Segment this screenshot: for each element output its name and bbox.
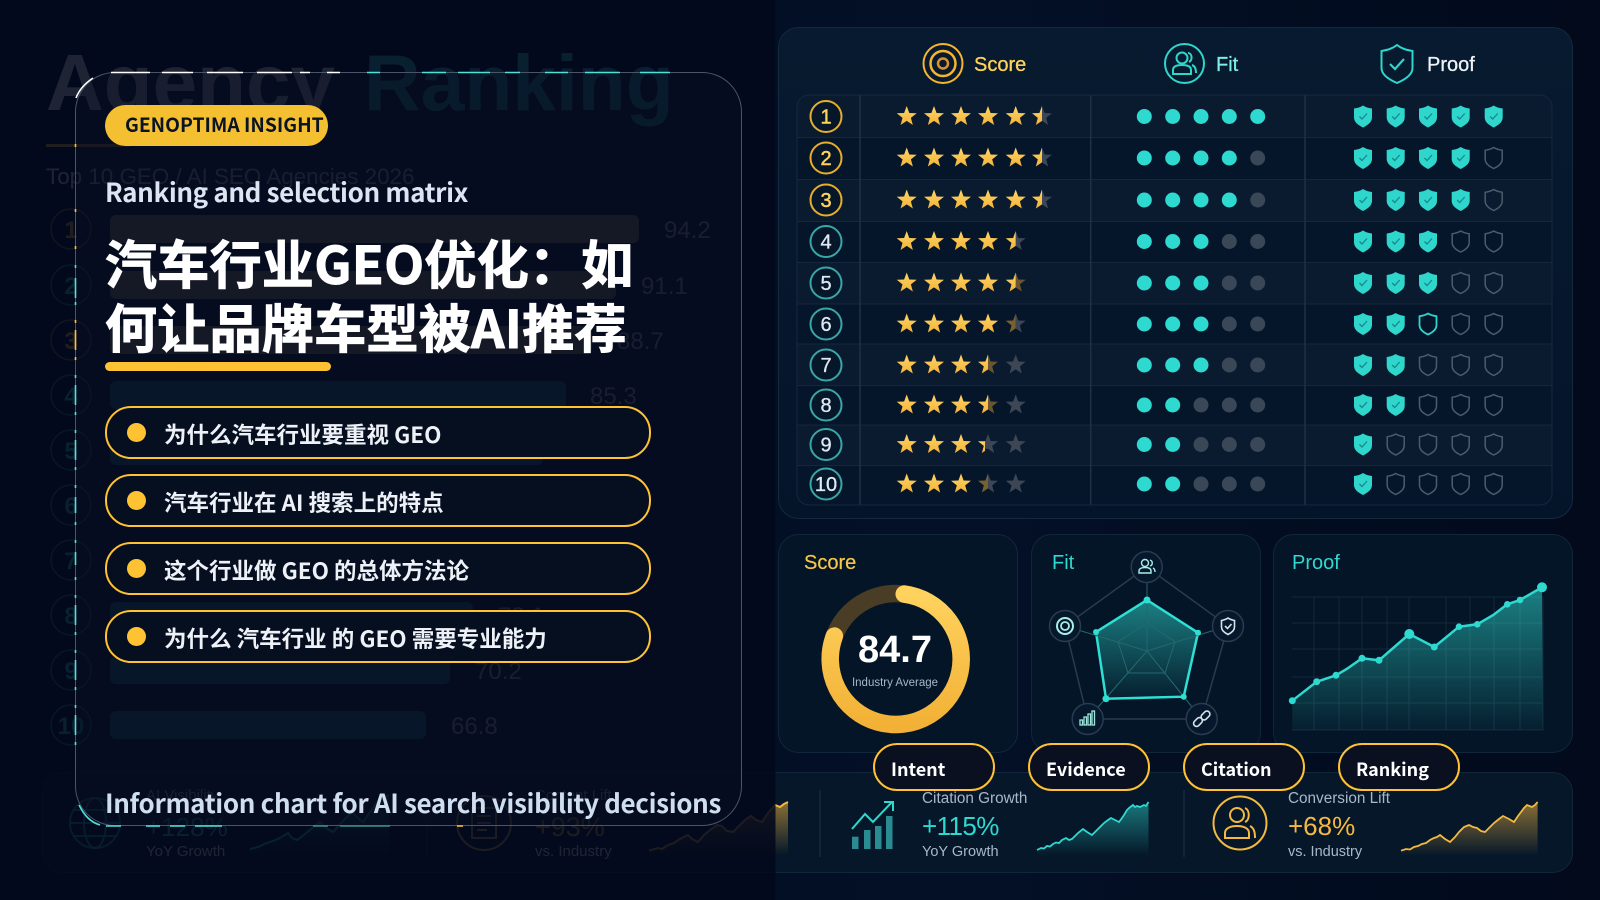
row 2: 2 (820, 148, 832, 170)
ghost bar rows: 88.7 (617, 328, 664, 355)
donut caption: Industry Average (852, 677, 938, 689)
metric: citation growth: Citation Growth (922, 790, 1027, 807)
ghost bar rows: 8 (64, 603, 78, 630)
row 6: 6 (820, 314, 832, 336)
ghost bar rows: 70.2 (475, 658, 522, 685)
tag: intent: Intent (891, 756, 945, 782)
row 7 (810, 350, 1502, 380)
icon: radar shield (1212, 610, 1244, 642)
ghost bar rows: 66.8 (451, 713, 498, 740)
ghost title: Ranking (364, 39, 674, 127)
metric: citation growth: +115% (922, 811, 999, 841)
heading: proof panel: Proof (1292, 552, 1340, 574)
donut value: 84.7 (858, 629, 932, 671)
ghost bar rows: 79.4 (545, 493, 592, 520)
row 4 (810, 226, 1502, 257)
heading: fit panel: Fit (1052, 552, 1075, 574)
title underline (105, 362, 331, 371)
panel: ranking matrix (778, 28, 1572, 518)
footer caption: Information chart for AI search visibility decisions (105, 784, 721, 821)
heading: fit: Fit (1216, 54, 1239, 76)
tag: citation: Citation (1201, 756, 1272, 782)
overlay card (75, 72, 742, 826)
icon: user circle (1214, 796, 1266, 850)
title: 何让品牌车型被AI推荐 (105, 288, 627, 362)
list item 2: 汽车行业在 AI 搜索上的特点 (164, 486, 444, 518)
ghost subtitle: Top 10 GEO / AI SEO Agencies 2026 (46, 164, 414, 189)
metric: citation growth (852, 790, 1148, 860)
ghost bar rows: 73.1 (498, 603, 545, 630)
row 3: 3 (820, 190, 832, 212)
ghost title: Agency (46, 38, 335, 127)
metric: AI visibility: AI Visibility (146, 787, 219, 804)
ghost bar rows: 10 (58, 713, 84, 740)
list item 3: 这个行业做 GEO 的总体方法论 (164, 554, 469, 586)
row 5: 5 (820, 273, 832, 295)
row 2 (810, 142, 1502, 174)
ghost bar rows (51, 209, 711, 745)
tag: citation (1183, 743, 1305, 791)
list item 4 (105, 610, 651, 663)
ghost bar rows: 4 (64, 383, 78, 410)
heading: score: Score (974, 54, 1026, 76)
ghost bar rows: 2 (64, 273, 78, 300)
tag: evidence: Evidence (1046, 756, 1126, 782)
icon: radar people (1131, 552, 1162, 582)
icon: score target (924, 44, 962, 83)
metric: content lift (457, 787, 788, 860)
list item 4: 为什么 汽车行业 的 GEO 需要专业能力 (164, 622, 547, 654)
title (105, 224, 634, 362)
row 3 (810, 184, 1502, 216)
row 1: 1 (820, 106, 832, 128)
row 8 (810, 390, 1502, 420)
area chart (1289, 582, 1547, 730)
heading: score panel: Score (804, 552, 856, 574)
tag: ranking: Ranking (1356, 756, 1429, 782)
icon: proof shield (1382, 45, 1412, 83)
icon: rising bars (852, 802, 893, 849)
metric: content lift: Content Lift (535, 787, 613, 804)
metric: conversion lift: +68% (1288, 811, 1355, 841)
icon: radar bars (1072, 704, 1103, 734)
row 10 (810, 468, 1502, 500)
tag: evidence (1028, 743, 1150, 791)
list item 3 (105, 542, 651, 595)
ghost ranking layer (46, 38, 711, 745)
metric: conversion lift: vs. Industry (1288, 844, 1363, 860)
subtitle: Ranking and selection matrix (105, 173, 468, 210)
panel: proof area chart (1274, 534, 1572, 752)
row 5 (810, 268, 1502, 298)
tag: intent (873, 743, 995, 791)
icon: radar link (1186, 704, 1217, 734)
ghost bar rows: 3 (64, 328, 78, 355)
list item 1 (105, 406, 651, 459)
row 9 (810, 429, 1502, 460)
ghost bar rows: 9 (64, 658, 78, 685)
row 7: 7 (820, 355, 832, 377)
panel: fit radar (1032, 534, 1260, 752)
ghost bar rows: 76.8 (525, 548, 572, 575)
ghost bar rows: 6 (64, 493, 78, 520)
ghost bar rows: 5 (64, 438, 78, 465)
ghost bar rows: 7 (64, 548, 78, 575)
row 9: 9 (820, 434, 832, 456)
metric: conversion lift: Conversion Lift (1288, 790, 1391, 807)
badge: GENOPTIMA INSIGHT (125, 110, 324, 138)
icon: radar target (1050, 610, 1080, 642)
metric: AI visibility (70, 787, 389, 860)
ghost title accent (46, 144, 130, 147)
ghost bar rows: 82.6 (568, 438, 615, 465)
ghost bar rows: 91.1 (641, 273, 688, 300)
panel: growth metrics strip (42, 772, 1572, 872)
radar chart (1065, 567, 1228, 719)
row 4: 4 (820, 232, 832, 254)
metric: content lift: vs. Industry (535, 843, 612, 860)
matrix table (797, 95, 1552, 505)
ghost bar rows: 1 (64, 217, 78, 244)
heading: proof: Proof (1427, 54, 1475, 76)
row 8: 8 (820, 395, 832, 417)
ghost bar rows: 94.2 (664, 217, 711, 244)
icon: fit people (1165, 44, 1204, 83)
row 10: 10 (815, 474, 837, 496)
tag: ranking (1338, 743, 1460, 791)
list item 1: 为什么汽车行业要重视 GEO (164, 418, 441, 450)
row 1 (810, 101, 1503, 132)
metric: AI visibility: +128% (146, 812, 228, 842)
panel: score donut (778, 534, 1018, 752)
metric: content lift: +93% (535, 812, 605, 842)
title: 汽车行业GEO优化：如 (105, 224, 634, 298)
donut chart (830, 594, 961, 724)
row 6 (810, 308, 1502, 340)
badge (105, 105, 328, 146)
list item 2 (105, 474, 651, 527)
metric: citation growth: YoY Growth (922, 844, 999, 860)
metric: conversion lift (1214, 790, 1538, 860)
metric: AI visibility: YoY Growth (146, 843, 225, 860)
ghost bar rows: 85.3 (590, 383, 637, 410)
